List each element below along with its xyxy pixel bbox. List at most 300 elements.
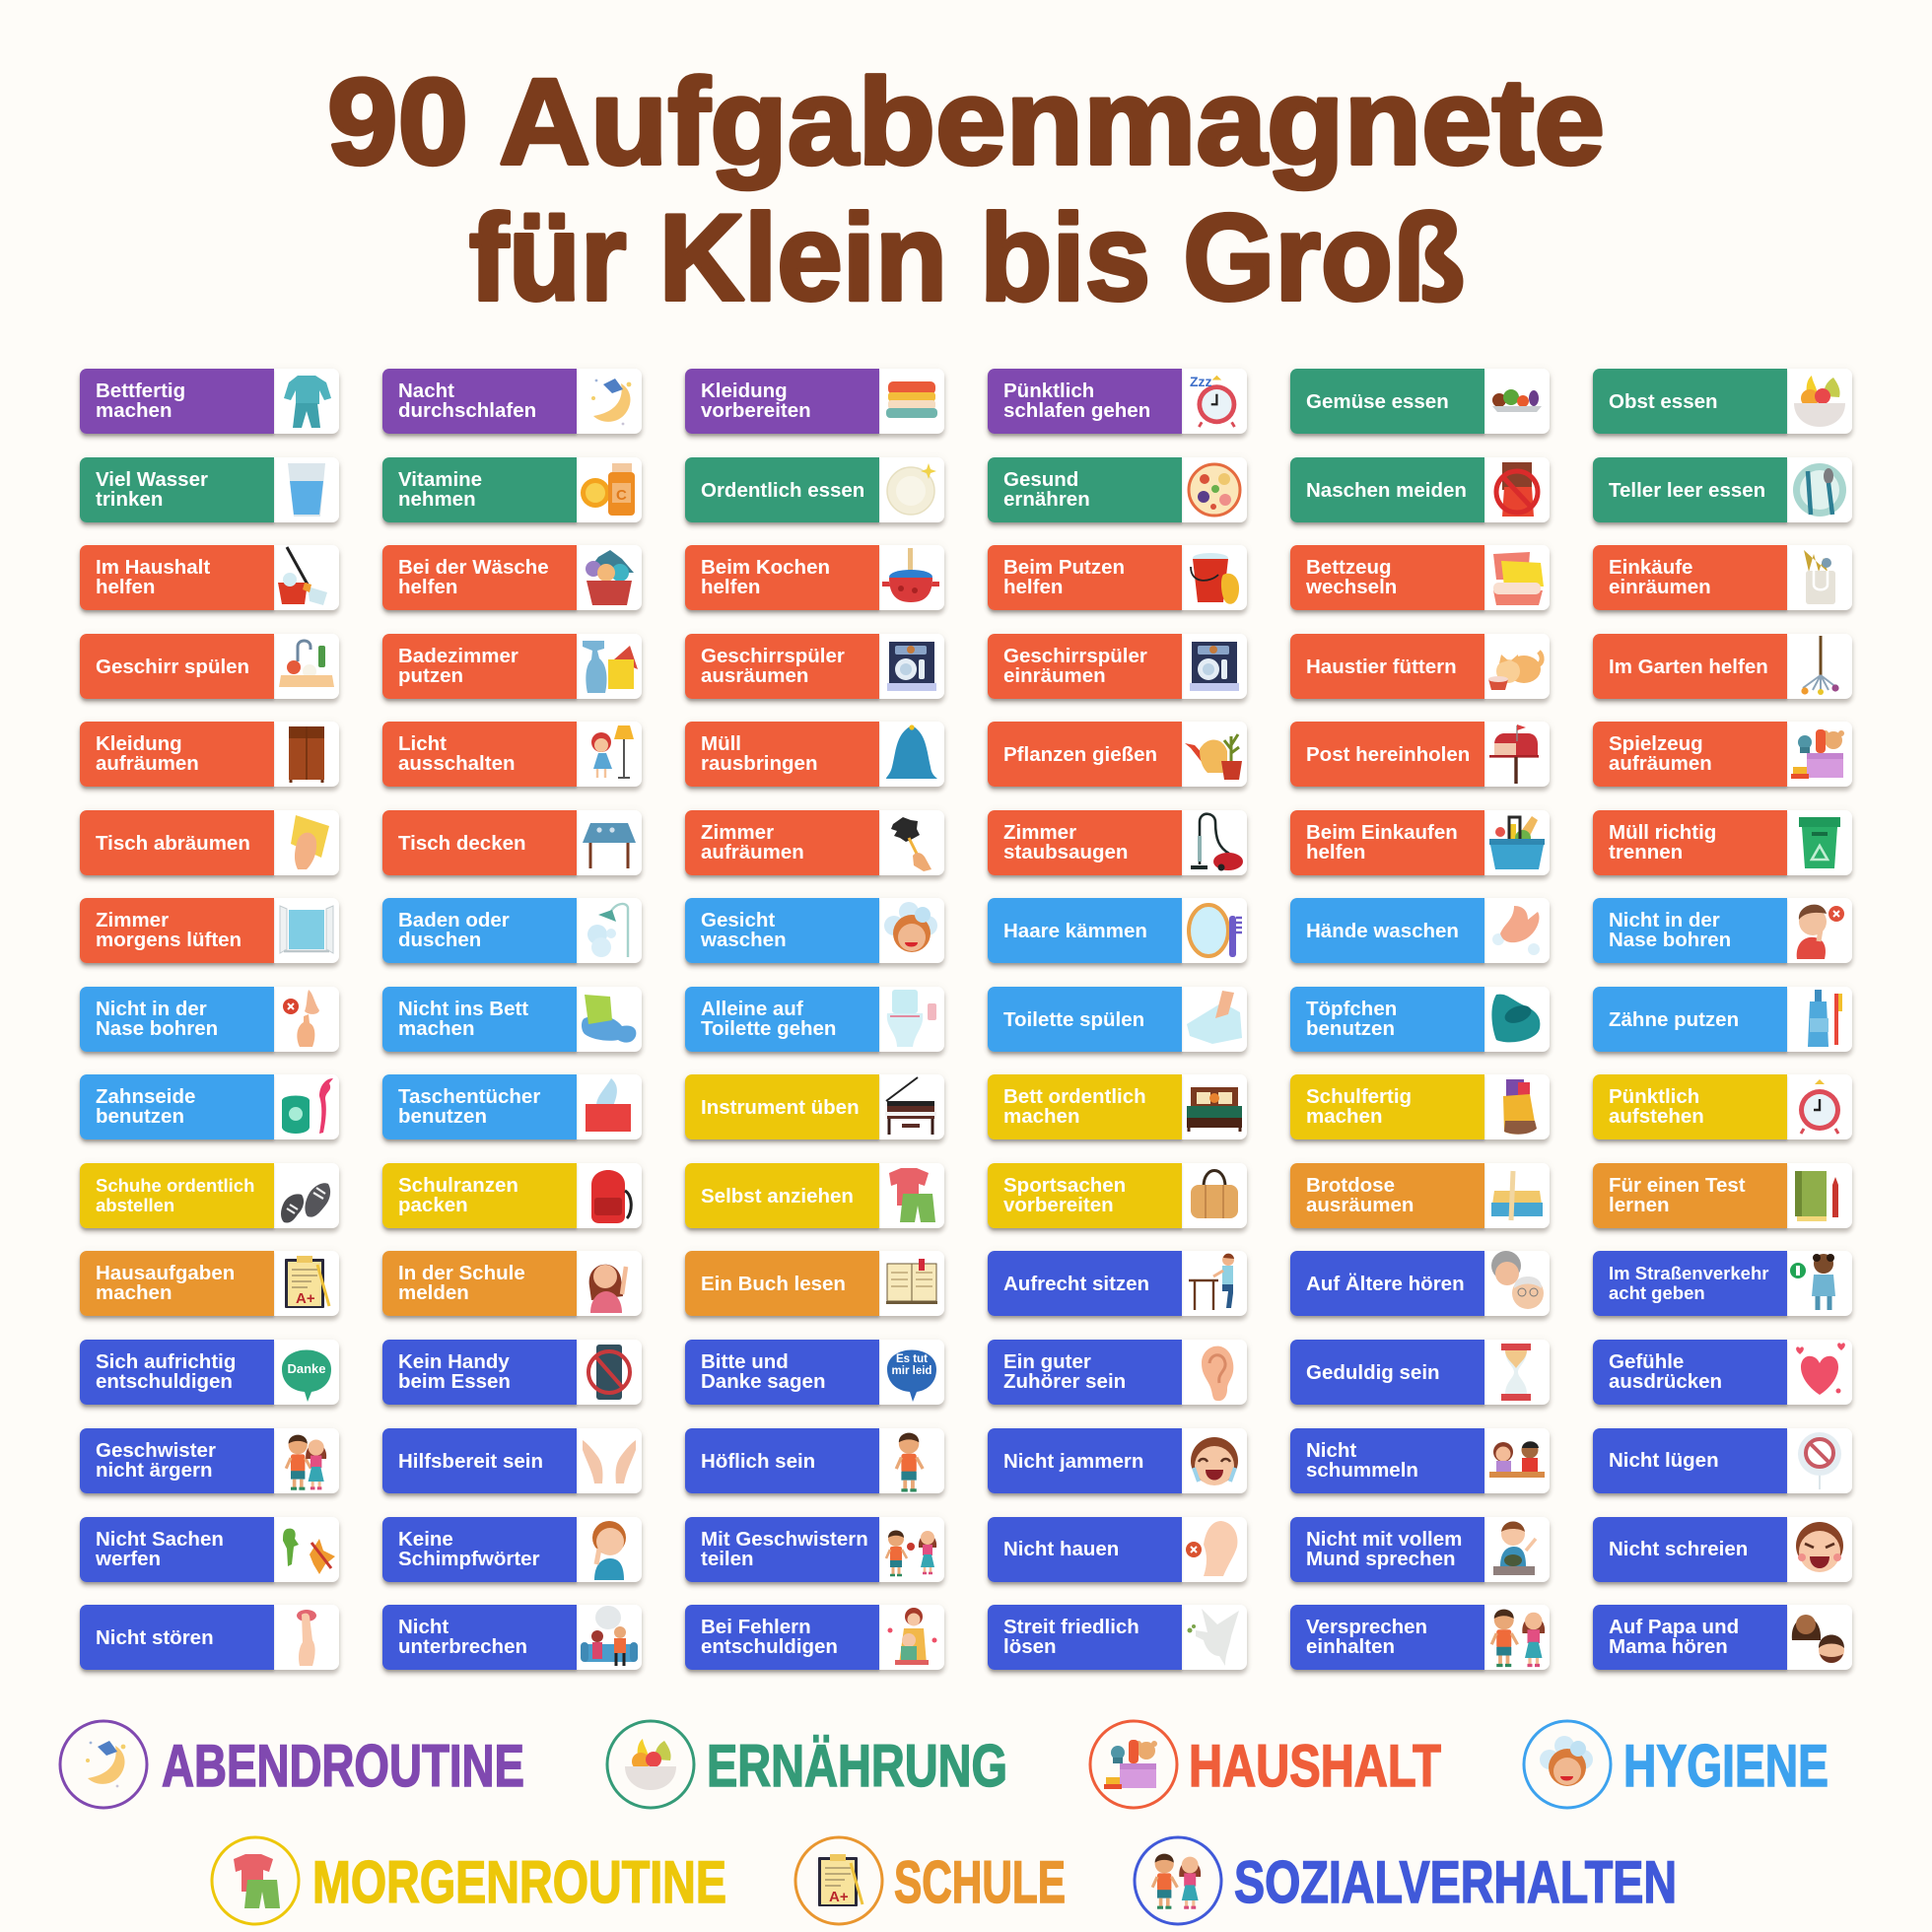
icon: grand piano [879, 1074, 944, 1139]
icon: finger on lips [274, 1605, 339, 1670]
icon: bucket and sponge [1190, 553, 1239, 604]
card: Badezimmer putzen: putzen [398, 664, 463, 687]
card: Haare kämmen: Haare kämmen [1003, 920, 1147, 942]
card: Auf Papa und Mama hören: Mama hören [1609, 1635, 1728, 1658]
card: Schulranzen packen: packen [398, 1194, 468, 1216]
card: Auf Ältere hören: Auf Ältere hören [1306, 1273, 1465, 1295]
card: Bei der Wäsche helfen: Bei der Wäsche [398, 556, 549, 579]
icon: phone forbidden [577, 1340, 642, 1405]
card: Selbst anziehen: Selbst anziehen [701, 1185, 854, 1208]
card: In der Schule melden [382, 1251, 642, 1316]
card: Töpfchen benutzen: Töpfchen [1306, 998, 1397, 1020]
card: Nicht in der Nase bohren: Nase bohren [96, 1017, 218, 1040]
card: Spielzeug aufräumen: aufräumen [1609, 752, 1712, 775]
card: Bitte und Danke sagen [685, 1340, 944, 1405]
card: Sich aufrichtig entschuldigen [80, 1340, 339, 1405]
card: Zimmer aufräumen: Zimmer [701, 821, 774, 844]
card: Nicht mit vollem Mund sprechen [1290, 1517, 1550, 1582]
card: Geschirrspüler einräumen [988, 634, 1247, 699]
card: Nicht in der Nase bohren (boy) [1593, 898, 1852, 963]
card: Sportsachen vorbereiten [988, 1163, 1247, 1228]
card: Beim Putzen helfen: Beim Putzen [1003, 556, 1125, 579]
icon: hand wiping with cloth [291, 815, 329, 869]
card: Nacht durchschlafen: durchschlafen [398, 399, 536, 422]
card: Geduldig sein: Geduldig sein [1306, 1361, 1440, 1384]
icon: made bed [1182, 1074, 1247, 1139]
card: Versprechen einhalten: Versprechen [1306, 1616, 1427, 1638]
card: Tisch abräumen [80, 810, 339, 875]
icon: toilet [879, 987, 944, 1052]
card: Hausaufgaben machen: machen [96, 1281, 172, 1304]
card: Brotdose ausräumen [1290, 1163, 1550, 1228]
card: Schulfertig machen: machen [1306, 1105, 1382, 1128]
card: Zähne putzen: Zähne putzen [1609, 1008, 1739, 1031]
card: Nicht unterbrechen: unterbrechen [398, 1635, 527, 1658]
card: Müll rausbringen: Müll [701, 732, 741, 755]
icon: school bag with books [1484, 1074, 1550, 1139]
card: Taschentücher benutzen: Taschentücher [398, 1085, 540, 1108]
card: Nicht schummeln: schummeln [1306, 1459, 1418, 1482]
card: Bett ordentlich machen [988, 1074, 1247, 1139]
icon: lunch box [1484, 1163, 1550, 1228]
icon: watering can and plant [1185, 733, 1242, 780]
card: Bettfertig machen: Bettfertig [96, 380, 185, 402]
card: Ein Buch lesen [685, 1251, 944, 1316]
card: Höflich sein [685, 1428, 944, 1493]
icon: chocolate forbidden [1494, 462, 1540, 517]
icon: mother and father faces [1787, 1605, 1852, 1670]
card: Schulranzen packen [382, 1163, 642, 1228]
card: Geschirrspüler einräumen: einräumen [1003, 664, 1106, 687]
icon: dental floss [274, 1074, 339, 1139]
icon: Es tut mir leid speech bubble: Es tut [896, 1353, 928, 1365]
icon: kitchen sink [279, 639, 334, 687]
icon: shopping bag [1804, 550, 1835, 604]
card: Nacht durchschlafen [382, 369, 642, 434]
card: Toilette spülen: Toilette spülen [1003, 1008, 1144, 1031]
card: Tisch decken [382, 810, 642, 875]
card: Zimmer morgens lüften: morgens lüften [96, 929, 242, 951]
card: Bei Fehlern entschuldigen [685, 1605, 944, 1670]
card: Nicht Sachen werfen [80, 1517, 339, 1582]
card: Aufrecht sitzen: Aufrecht sitzen [1003, 1273, 1149, 1295]
card: Teller leer essen [1593, 457, 1852, 522]
icon: vegetable plate [1492, 389, 1542, 412]
card: Nicht lügen: Nicht lügen [1609, 1449, 1719, 1472]
card: Im Garten helfen [1593, 634, 1852, 699]
icon: set table [583, 823, 636, 868]
card: Beim Putzen helfen: helfen [1003, 576, 1063, 598]
icon: clipboard [274, 1251, 339, 1316]
card: Für einen Test lernen: lernen [1609, 1194, 1670, 1216]
icon: mop and bucket [278, 546, 327, 605]
card: Obst essen [1593, 369, 1852, 434]
card: Obst essen: Obst essen [1609, 390, 1718, 413]
legend item: Morgenroutine [212, 1837, 726, 1924]
card: Mit Geschwistern teilen [685, 1517, 944, 1582]
legend item: Ernährung [607, 1721, 1007, 1808]
icon: empty plate with cutlery [1793, 463, 1846, 517]
icon: Es tut mir leid speech bubble [879, 1340, 944, 1405]
icon: crying child [1182, 1428, 1247, 1493]
icon: pyjamas [284, 376, 331, 428]
card: Vitamine nehmen [382, 457, 642, 522]
card: Nicht ins Bett machen: Nicht ins Bett [398, 998, 528, 1020]
card: Auf Papa und Mama hören [1593, 1605, 1852, 1670]
card: Versprechen einhalten: einhalten [1306, 1635, 1395, 1658]
icon: toothpaste and brush [1787, 987, 1852, 1052]
card: Ordentlich essen: Ordentlich essen [701, 479, 864, 502]
card: Kleidung vorbereiten [685, 369, 944, 434]
card: Gesicht waschen: Gesicht [701, 909, 775, 932]
card: Licht ausschalten [382, 722, 642, 787]
card: Nicht schummeln [1290, 1428, 1550, 1493]
card: Kein Handy beim Essen: Kein Handy [398, 1350, 510, 1373]
card: Hilfsbereit sein: Hilfsbereit sein [398, 1450, 543, 1473]
card: Viel Wasser trinken: Viel Wasser [96, 468, 208, 491]
card: Mit Geschwistern teilen: Mit Geschwistern [701, 1528, 868, 1551]
card: Gemüse essen [1290, 369, 1550, 434]
legend item: Abendroutine: ABENDROUTINE [162, 1733, 524, 1799]
icon: alarm clock with zzz: Zzz [1190, 374, 1212, 389]
icon: fist with cross [1182, 1517, 1247, 1582]
card: Pünktlich aufstehen [1593, 1074, 1852, 1139]
card: Bei der Wäsche helfen [382, 545, 642, 610]
card: Nicht in der Nase bohren (boy): Nase bohren [1609, 929, 1731, 951]
card: Bettfertig machen: machen [96, 399, 172, 422]
card: Sich aufrichtig entschuldigen: Sich aufrichtig [96, 1350, 236, 1373]
legend item: Hygiene [1524, 1721, 1828, 1808]
icon: mailbox [1489, 724, 1539, 784]
icon: orange and vitamin bottle [581, 463, 635, 516]
icon: orange and vitamin bottle: C [616, 487, 627, 504]
icon: child sitting at desk [1182, 1251, 1247, 1316]
card: Haustier füttern: Haustier füttern [1306, 656, 1457, 678]
legend item: Morgenroutine: MORGENROUTINE [312, 1849, 726, 1915]
card: Schuhe ordentlich abstellen: abstellen [96, 1195, 174, 1215]
card: Zahnseide benutzen: Zahnseide [96, 1085, 195, 1108]
icon: feather duster [891, 817, 932, 871]
legend item: Schule [795, 1837, 1066, 1924]
card: Gefühle ausdrücken [1593, 1340, 1852, 1405]
icon: fruit bowl [1794, 376, 1845, 427]
card: Viel Wasser trinken [80, 457, 339, 522]
card: Auf Papa und Mama hören: Auf Papa und [1609, 1616, 1739, 1638]
card: Nicht schreien: Nicht schreien [1609, 1538, 1748, 1560]
card: Schulfertig machen [1290, 1074, 1550, 1139]
icon: girl and floor lamp [591, 725, 634, 779]
card: Ein Buch lesen: Ein Buch lesen [701, 1273, 846, 1295]
icon: sharing siblings [879, 1517, 944, 1582]
icon: cat eating [1488, 650, 1545, 690]
icon: Es tut mir leid speech bubble: mir leid [892, 1365, 932, 1377]
legend item: Ernährung: ERNÄHRUNG [707, 1733, 1007, 1799]
icon: boy picking nose [1787, 898, 1852, 963]
card: Brotdose ausräumen: ausräumen [1306, 1194, 1414, 1216]
card: Nacht durchschlafen: Nacht [398, 380, 454, 402]
icon: open book [879, 1251, 944, 1316]
card: Ordentlich essen [685, 457, 944, 522]
card: Teller leer essen: Teller leer essen [1609, 479, 1765, 502]
card: Kleidung vorbereiten: Kleidung [701, 380, 788, 402]
icon: open hands [577, 1428, 642, 1493]
card: Nicht schummeln: Nicht [1306, 1439, 1356, 1462]
card: Zimmer staubsaugen: staubsaugen [1003, 841, 1128, 863]
card: Geschirr spülen: Geschirr spülen [96, 656, 249, 678]
card: Töpfchen benutzen [1290, 987, 1550, 1052]
card: Pünktlich schlafen gehen [988, 369, 1247, 434]
icon: tissue box [577, 1074, 642, 1139]
legend item: Sozialverhalten: SOZIALVERHALTEN [1234, 1849, 1677, 1915]
icon: child and green traffic light [1787, 1251, 1852, 1316]
icon: spray bottle and cloth [583, 641, 638, 693]
card: Versprechen einhalten [1290, 1605, 1550, 1670]
legend [0, 1705, 1932, 1932]
icon: open window [280, 905, 333, 954]
card: Pflanzen gießen [988, 722, 1247, 787]
card: Bei Fehlern entschuldigen: entschuldigen [701, 1635, 838, 1658]
icon: toy box [1791, 729, 1844, 779]
card: Hilfsbereit sein [382, 1428, 642, 1493]
card: Höflich sein: Höflich sein [701, 1450, 815, 1473]
card: Nicht in der Nase bohren: Nicht in der [96, 998, 207, 1020]
card: Schulfertig machen: Schulfertig [1306, 1085, 1412, 1108]
icon: washing hands [1484, 898, 1550, 963]
card: Keine Schimpfwörter: Schimpfwörter [398, 1548, 540, 1570]
icon: peace dove [1182, 1605, 1247, 1670]
card: Für einen Test lernen [1593, 1163, 1852, 1228]
icon: mirror and comb [1182, 898, 1247, 963]
card: Bitte und Danke sagen: Bitte und [701, 1350, 789, 1373]
card: Bitte und Danke sagen: Danke sagen [701, 1370, 825, 1393]
card: Beim Kochen helfen [685, 545, 944, 610]
icon: glass of water [288, 463, 325, 517]
icon: Danke speech bubble: Danke [287, 1361, 326, 1376]
icon: polite boy [879, 1428, 944, 1493]
card: Pünktlich schlafen gehen: Pünktlich [1003, 380, 1094, 402]
icon: pillows and bedding [1493, 552, 1544, 605]
card: Pünktlich aufstehen: aufstehen [1609, 1105, 1704, 1128]
card: Im Straßenverkehr acht geben: Im Straßenverkehr [1609, 1263, 1768, 1283]
icon: trash bag [886, 724, 937, 779]
card: Zimmer staubsaugen: Zimmer [1003, 821, 1076, 844]
card: Nicht mit vollem Mund sprechen: Nicht mit vollem [1306, 1528, 1462, 1551]
card: Alleine auf Toilette gehen: Alleine auf [701, 998, 803, 1020]
legend item: Sozialverhalten [1135, 1837, 1677, 1924]
card: Müll rausbringen [685, 722, 944, 787]
card: Viel Wasser trinken: trinken [96, 488, 163, 511]
card: Baden oder duschen: Baden oder [398, 909, 510, 932]
card: In der Schule melden: melden [398, 1281, 469, 1304]
card: Nicht ins Bett machen [382, 987, 642, 1052]
icon: shopping basket [1489, 816, 1545, 869]
card: Töpfchen benutzen: benutzen [1306, 1017, 1395, 1040]
card: Pflanzen gießen: Pflanzen gießen [1003, 743, 1157, 766]
card: Kleidung aufräumen: aufräumen [96, 752, 199, 775]
card: Haustier füttern [1290, 634, 1550, 699]
card: Müll richtig trennen: trennen [1609, 841, 1683, 863]
icon: food plate [1187, 463, 1242, 517]
card: Gesicht waschen [685, 898, 944, 963]
card: Sich aufrichtig entschuldigen: entschuldigen [96, 1370, 233, 1393]
card: Zimmer morgens lüften: Zimmer [96, 909, 169, 932]
card: Nicht lügen [1593, 1428, 1852, 1493]
icon: laundry basket [586, 550, 634, 605]
card: Zahnseide benutzen: benutzen [96, 1105, 184, 1128]
icon: girl raising hand [577, 1251, 642, 1316]
card: Nicht schreien [1593, 1517, 1852, 1582]
card: Gemüse essen: Gemüse essen [1306, 390, 1449, 413]
card: Zimmer aufräumen [685, 810, 944, 875]
card: Spielzeug aufräumen [1593, 722, 1852, 787]
icon: parents talking on sofa [577, 1605, 642, 1670]
card: Alleine auf Toilette gehen: Toilette gehen [701, 1017, 836, 1040]
card: Streit friedlich lösen: Streit friedlich [1003, 1616, 1139, 1638]
card: Gesund ernähren [988, 457, 1247, 522]
title: für Klein bis Groß [469, 190, 1465, 326]
card: Post hereinholen [1290, 722, 1550, 787]
card: Schuhe ordentlich abstellen [80, 1163, 339, 1228]
card: Sportsachen vorbereiten: Sportsachen [1003, 1174, 1126, 1197]
card: Nicht hauen: Nicht hauen [1003, 1538, 1119, 1560]
card: Geschwister nicht ärgern: Geschwister [96, 1439, 216, 1462]
card: Geschirrspüler einräumen: Geschirrspüler [1003, 645, 1147, 667]
card: Haare kämmen [988, 898, 1247, 963]
card: Kein Handy beim Essen: beim Essen [398, 1370, 511, 1393]
card: Hausaufgaben machen [80, 1251, 339, 1316]
card: Hausaufgaben machen: Hausaufgaben [96, 1262, 235, 1284]
title: 90 Aufgabenmagnete [327, 54, 1605, 190]
legend item: Haushalt: HAUSHALT [1189, 1733, 1441, 1799]
card: Pünktlich aufstehen: Pünktlich [1609, 1085, 1699, 1108]
card: Schulranzen packen: Schulranzen [398, 1174, 518, 1197]
card: Gesund ernähren: Gesund [1003, 468, 1078, 491]
card: Im Garten helfen: Im Garten helfen [1609, 656, 1768, 678]
card: Hände waschen [1290, 898, 1550, 963]
card: Geschirrspüler ausräumen: ausräumen [701, 664, 808, 687]
card: Für einen Test lernen: Für einen Test [1609, 1174, 1746, 1197]
card: Nicht ins Bett machen: machen [398, 1017, 474, 1040]
card: Vitamine nehmen: nehmen [398, 488, 476, 511]
card: Geschirrspüler ausräumen: Geschirrspüler [701, 645, 845, 667]
card: Nicht Sachen werfen: werfen [96, 1548, 161, 1570]
icon: recycling bin [1799, 817, 1840, 868]
card: Taschentücher benutzen [382, 1074, 642, 1139]
icon: boy and girl [1484, 1605, 1550, 1670]
icon: dishwasher [887, 642, 936, 691]
card: Badezimmer putzen: Badezimmer [398, 645, 518, 667]
card: Ein guter Zuhörer sein [988, 1340, 1247, 1405]
icon: shower [587, 903, 629, 957]
card: Müll richtig trennen [1593, 810, 1852, 875]
card: Badezimmer putzen [382, 634, 642, 699]
icon: wet pillow [577, 987, 642, 1052]
card: Bett ordentlich machen: machen [1003, 1105, 1079, 1128]
card: Beim Kochen helfen: Beim Kochen [701, 556, 830, 579]
card: Beim Einkaufen helfen: helfen [1306, 841, 1365, 863]
card: Tisch abräumen: Tisch abräumen [96, 832, 250, 855]
card: Naschen meiden: Naschen meiden [1306, 479, 1467, 502]
card: Kleidung aufräumen [80, 722, 339, 787]
icon: rake [1801, 636, 1839, 695]
card: Mit Geschwistern teilen: teilen [701, 1548, 754, 1570]
icon: book and pencil [1787, 1163, 1852, 1228]
card: Keine Schimpfwörter [382, 1517, 642, 1582]
card: Ein guter Zuhörer sein: Ein guter [1003, 1350, 1091, 1373]
card: Bettzeug wechseln: wechseln [1306, 576, 1397, 598]
card: Licht ausschalten: ausschalten [398, 752, 515, 775]
card: Licht ausschalten: Licht [398, 732, 447, 755]
icon: alarm clock with zzz [1190, 374, 1236, 428]
card: Spielzeug aufräumen: Spielzeug [1609, 732, 1703, 755]
card: Geschwister nicht ärgern: nicht ärgern [96, 1459, 212, 1482]
card: Instrument üben [685, 1074, 944, 1139]
icon: vacuum cleaner [1191, 812, 1243, 871]
card: Nicht in der Nase bohren (boy): Nicht in der [1609, 909, 1720, 932]
card: Beim Putzen helfen [988, 545, 1247, 610]
icon: thrown toys [274, 1517, 339, 1582]
card: Bei Fehlern entschuldigen: Bei Fehlern [701, 1616, 811, 1638]
card: Bettzeug wechseln [1290, 545, 1550, 610]
card: Zahnseide benutzen [80, 1074, 339, 1139]
card: Gesicht waschen: waschen [701, 929, 787, 951]
card: Selbst anziehen [685, 1163, 944, 1228]
card: Einkäufe einräumen [1593, 545, 1852, 610]
card: Beim Einkaufen helfen: Beim Einkaufen [1306, 821, 1458, 844]
card: Geduldig sein [1290, 1340, 1550, 1405]
card: Streit friedlich lösen: lösen [1003, 1635, 1057, 1658]
card: Kein Handy beim Essen [382, 1340, 642, 1405]
icon: kids at a desk [1484, 1428, 1550, 1493]
icon: thinking boy [577, 1517, 642, 1582]
card: Post hereinholen: Post hereinholen [1306, 743, 1470, 766]
card: Kleidung aufräumen: Kleidung [96, 732, 182, 755]
icon: child washing face [884, 902, 937, 952]
card: Einkäufe einräumen: Einkäufe [1609, 556, 1692, 579]
card: Instrument üben: Instrument üben [701, 1096, 860, 1119]
card: Nicht stören: Nicht stören [96, 1626, 214, 1649]
icon: moon [591, 379, 631, 426]
card: Streit friedlich lösen [988, 1605, 1247, 1670]
card: Nicht in der Nase bohren [80, 987, 339, 1052]
card: Alleine auf Toilette gehen [685, 987, 944, 1052]
card: Im Haushalt helfen [80, 545, 339, 610]
icon: hand flushing toilet [1182, 987, 1247, 1052]
card: Beim Kochen helfen: helfen [701, 576, 760, 598]
card: Gefühle ausdrücken: Gefühle [1609, 1350, 1684, 1373]
card: Baden oder duschen [382, 898, 642, 963]
icon: shirt and shorts [879, 1163, 944, 1228]
icon: hourglass [1484, 1340, 1550, 1405]
legend item: Abendroutine [60, 1721, 524, 1808]
card: Müll rausbringen: rausbringen [701, 752, 817, 775]
card: Im Haushalt helfen: helfen [96, 576, 155, 598]
icon: pair of shoes [274, 1163, 339, 1228]
card: Nicht jammern [988, 1428, 1247, 1493]
icon: cooking pot [882, 548, 939, 602]
icon: grandparents [1484, 1251, 1550, 1316]
card: Im Straßenverkehr acht geben [1593, 1251, 1852, 1316]
icon: dishwasher [1190, 642, 1239, 691]
icon: potty [1484, 987, 1550, 1052]
icon: ear [1182, 1340, 1247, 1405]
icon: clean plate [886, 463, 936, 516]
icon: no sign [1787, 1428, 1852, 1493]
card: Auf Ältere hören [1290, 1251, 1550, 1316]
card: Sportsachen vorbereiten: vorbereiten [1003, 1194, 1114, 1216]
card: Bett ordentlich machen: Bett ordentlich [1003, 1085, 1146, 1108]
card: Nicht hauen [988, 1517, 1247, 1582]
